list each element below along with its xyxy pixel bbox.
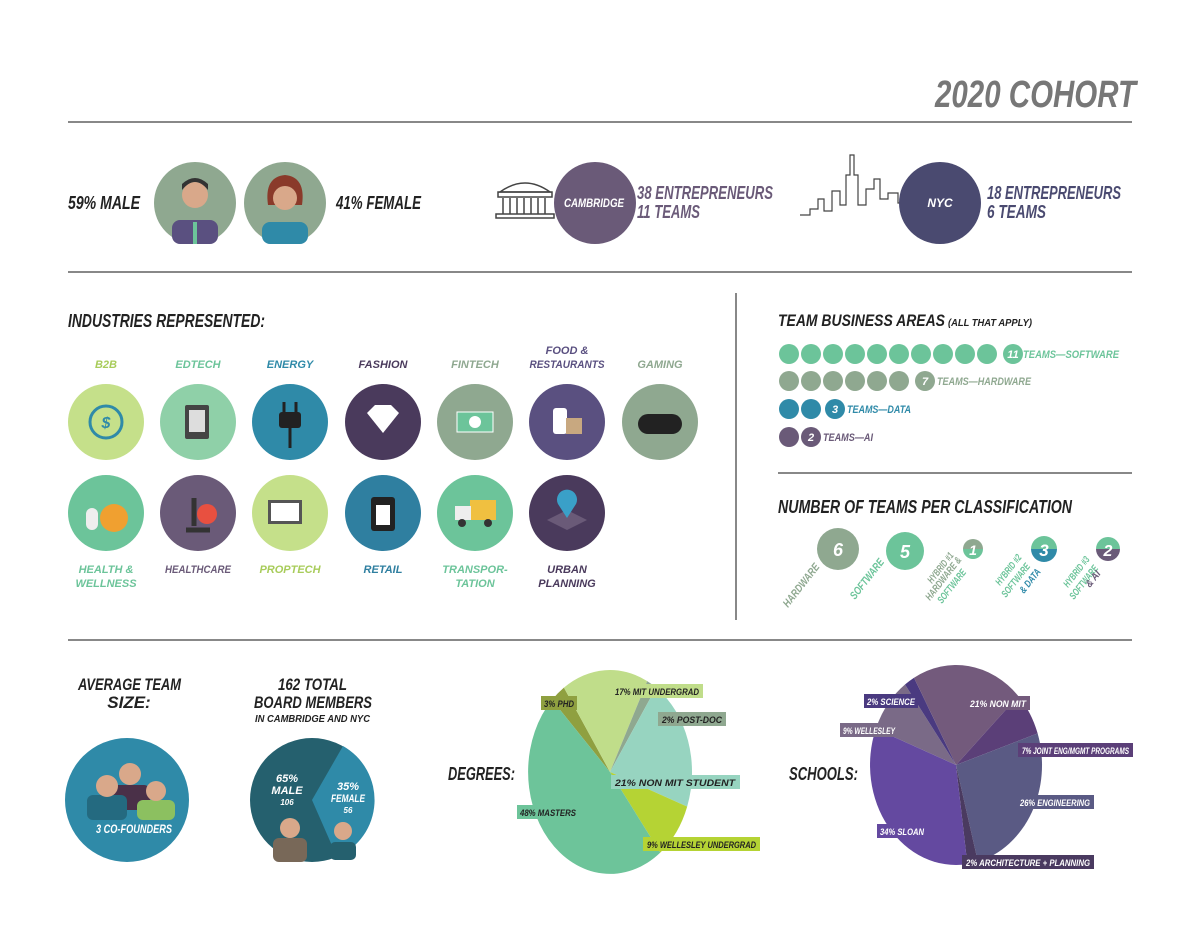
teams per classification: 2 bbox=[1103, 543, 1113, 560]
teams per classification: & AI bbox=[1084, 569, 1104, 590]
icon: MIT dome bbox=[496, 183, 554, 218]
degrees pie bbox=[448, 670, 760, 874]
degrees pie: 48% MASTERS bbox=[519, 808, 576, 818]
schools pie: 2% SCIENCE bbox=[866, 697, 916, 707]
board members: 106 bbox=[280, 798, 294, 807]
board members: 56 bbox=[344, 806, 353, 815]
industries grid: FINTECH bbox=[451, 359, 500, 371]
degrees pie: DEGREES: bbox=[448, 764, 515, 784]
teams per classification: HYBRID #3 bbox=[1062, 554, 1093, 590]
teams per classification: HARDWARE bbox=[781, 561, 823, 610]
icon: male bbox=[154, 162, 236, 244]
board members: 162 TOTAL bbox=[278, 675, 347, 694]
industries grid: URBAN bbox=[547, 564, 588, 576]
nyc stats bbox=[800, 155, 1121, 244]
degrees pie: 21% NON MIT STUDENT bbox=[614, 778, 737, 788]
industries heading: INDUSTRIES REPRESENTED: bbox=[68, 311, 265, 331]
cambridge stats: 38 ENTREPRENEURS bbox=[637, 183, 773, 203]
average team size bbox=[65, 675, 189, 862]
industries grid: RETAIL bbox=[364, 564, 403, 576]
teams per classification: 5 bbox=[900, 542, 911, 562]
industries grid: RESTAURANTS bbox=[530, 359, 605, 371]
teams per classification bbox=[778, 497, 1120, 610]
industries grid: ENERGY bbox=[267, 359, 315, 371]
nyc stats: 18 ENTREPRENEURS bbox=[987, 183, 1121, 203]
board members: 65% bbox=[276, 773, 298, 785]
teams per classification: HYBRID #2 bbox=[994, 552, 1025, 588]
teams per classification: 3 bbox=[1039, 541, 1049, 560]
team business areas: TEAMS—SOFTWARE bbox=[1023, 349, 1120, 361]
schools pie: 7% JOINT ENG/MGMT PROGRAMS bbox=[1022, 746, 1129, 756]
team business areas bbox=[778, 311, 1120, 447]
teams per classification: HARDWARE & bbox=[924, 555, 964, 603]
nyc stats: NYC bbox=[927, 196, 953, 210]
degrees pie: 17% MIT UNDERGRAD bbox=[615, 687, 699, 697]
board members: IN CAMBRIDGE AND NYC bbox=[255, 714, 371, 725]
teams per classification: 1 bbox=[969, 542, 977, 558]
industries grid: $ bbox=[101, 415, 112, 432]
industries grid: TRANSPOR- bbox=[442, 564, 508, 576]
industries grid bbox=[68, 345, 698, 590]
nyc stats: 6 TEAMS bbox=[987, 202, 1046, 222]
industries grid: FOOD & bbox=[546, 345, 588, 357]
industries grid: EDTECH bbox=[175, 359, 222, 371]
industries grid: PLANNING bbox=[538, 578, 596, 590]
industries grid: B2B bbox=[95, 359, 117, 371]
average team size: SIZE: bbox=[107, 693, 151, 712]
gender stats bbox=[68, 162, 422, 244]
team business areas: 3 bbox=[832, 404, 838, 416]
schools pie: 2% ARCHITECTURE + PLANNING bbox=[965, 858, 1090, 868]
team business areas: TEAMS—AI bbox=[823, 432, 874, 444]
team business areas: TEAM BUSINESS AREAS bbox=[778, 311, 946, 330]
team business areas: 7 bbox=[922, 376, 929, 388]
teams per classification: SOFTWARE bbox=[1068, 563, 1101, 602]
teams per classification: SOFTWARE bbox=[848, 556, 887, 602]
schools pie: 9% WELLESLEY bbox=[843, 726, 896, 736]
teams per classification: & DATA bbox=[1018, 567, 1044, 596]
industries grid: PROPTECH bbox=[259, 564, 322, 576]
board members: BOARD MEMBERS bbox=[254, 693, 373, 712]
schools pie: 26% ENGINEERING bbox=[1019, 798, 1090, 808]
teams per classification: NUMBER OF TEAMS PER CLASSIFICATION bbox=[778, 497, 1073, 517]
team business areas: 11 bbox=[1007, 349, 1019, 361]
team business areas: TEAMS—HARDWARE bbox=[937, 376, 1032, 388]
industries grid: WELLNESS bbox=[75, 578, 137, 590]
schools pie: 34% SLOAN bbox=[880, 827, 924, 837]
industries grid: TATION bbox=[455, 578, 496, 590]
gender stats: 59% MALE bbox=[68, 193, 141, 213]
degrees pie: 9% WELLESLEY UNDERGRAD bbox=[647, 840, 756, 850]
average team size: 3 CO-FOUNDERS bbox=[96, 822, 172, 836]
schools pie: SCHOOLS: bbox=[789, 764, 858, 784]
teams per classification: HYBRID #1 bbox=[926, 550, 957, 586]
industries grid: HEALTHCARE bbox=[165, 564, 232, 576]
cambridge stats bbox=[496, 162, 773, 244]
gender stats: 41% FEMALE bbox=[335, 193, 422, 213]
cambridge stats: 11 TEAMS bbox=[637, 202, 700, 222]
icon: female bbox=[244, 162, 326, 244]
industries grid: FASHION bbox=[359, 359, 408, 371]
team business areas: TEAMS—DATA bbox=[847, 404, 911, 416]
teams per classification: SOFTWARE bbox=[936, 567, 969, 606]
icon: skyline bbox=[800, 155, 918, 215]
title: 2020 COHORT bbox=[934, 74, 1138, 116]
industries grid: HEALTH & bbox=[79, 564, 133, 576]
teams per classification: SOFTWARE bbox=[1000, 561, 1033, 600]
board members: FEMALE bbox=[331, 793, 365, 805]
board members: MALE bbox=[271, 785, 303, 797]
team business areas: (ALL THAT APPLY) bbox=[948, 318, 1033, 329]
degrees pie: 2% POST-DOC bbox=[661, 715, 722, 725]
cambridge stats: CAMBRIDGE bbox=[564, 196, 625, 210]
degrees pie: 3% PHD bbox=[544, 699, 574, 709]
teams per classification: 6 bbox=[833, 540, 844, 560]
team business areas: 2 bbox=[807, 432, 814, 444]
board members: 35% bbox=[337, 781, 359, 793]
schools pie: 21% NON MIT bbox=[969, 699, 1027, 709]
industries grid: GAMING bbox=[637, 359, 683, 371]
schools pie bbox=[789, 665, 1133, 869]
board members bbox=[250, 675, 375, 862]
average team size: AVERAGE TEAM bbox=[77, 675, 182, 694]
